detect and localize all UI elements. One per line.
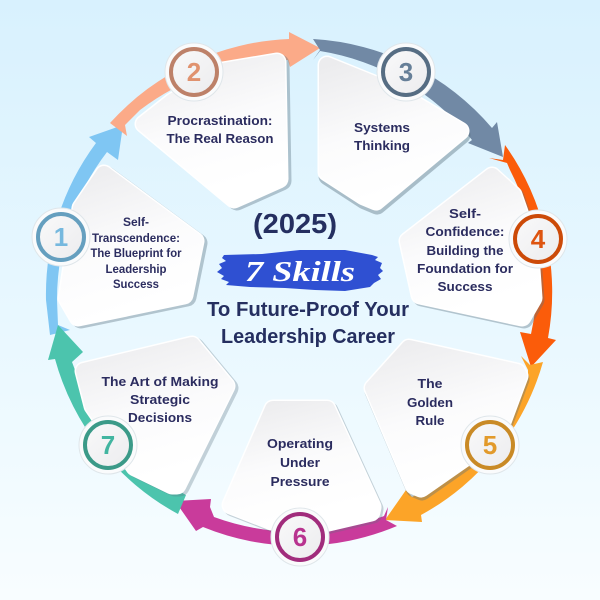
label 1: Self-Transcendence: Success <box>113 279 159 291</box>
label 4: Self-Confidence <box>417 206 513 294</box>
label 6: Operating Under Pressure <box>267 436 333 489</box>
label 1: Self-Transcendence: Transcendence: <box>92 233 180 245</box>
label 3: Systems Thinking: Systems <box>354 120 410 135</box>
label 6: Operating Under Pressure: Operating <box>267 436 333 451</box>
title: year: (2025) <box>253 208 337 239</box>
badge 2: 2 <box>187 57 201 87</box>
label 5: The Golden Rule: The <box>418 376 442 391</box>
label 7: The Art of Making Strategic Decisions: Decisions <box>128 410 192 425</box>
label 4: Self-Confidence: Self- <box>449 206 481 221</box>
arrow 3: slate <box>313 39 503 157</box>
badge 6 <box>271 508 329 566</box>
label 3: Systems Thinking <box>354 120 410 153</box>
subtitle: To Future-Proof Your <box>207 299 409 321</box>
subtitle <box>207 299 409 348</box>
label 5: The Golden Rule: Rule <box>416 413 444 428</box>
label 7: The Art of Making Strategic Decisions <box>102 374 219 425</box>
badge 3 <box>377 43 435 101</box>
arrow 7: teal <box>48 325 186 514</box>
arrow 2: peach <box>110 32 320 136</box>
badge 7 <box>79 416 137 474</box>
label 1: Self-Transcendence: The Blueprint for <box>90 248 182 260</box>
arrow 4: orange <box>489 145 556 367</box>
label 4: Self-Confidence: Building the <box>426 243 504 258</box>
label 2: Procrastination: The Real Reason <box>166 131 274 146</box>
card 7 <box>84 345 229 487</box>
badge 5: 5 <box>483 430 497 460</box>
badge 1 <box>32 208 90 266</box>
card 6 <box>231 409 374 525</box>
card 3 <box>327 65 461 205</box>
badge 6: 6 <box>293 522 307 552</box>
subtitle: Leadership Career <box>221 326 395 348</box>
badge 3: 3 <box>399 57 413 87</box>
badge 5 <box>461 416 519 474</box>
label 2: Procrastination: Procrastination: <box>168 113 272 128</box>
label 4: Self-Confidence: Success <box>438 279 492 294</box>
label 4: Self-Confidence: Foundation for <box>417 261 513 276</box>
label 1: Self-Transcendence: Leadership <box>106 264 166 276</box>
card 1 <box>67 174 198 319</box>
card 2 <box>144 62 282 201</box>
label 5: The Golden Rule <box>407 376 453 428</box>
banner: 7 Skills brush stroke <box>217 250 383 291</box>
arrow 1: blue <box>46 125 123 335</box>
badge 2 <box>165 43 223 101</box>
label 7: The Art of Making Strategic Decisions: Strategic <box>130 392 190 407</box>
label 2: Procrastination <box>166 113 274 146</box>
badge 4 <box>509 210 567 268</box>
label 4: Self-Confidence: Confidence: <box>426 224 504 239</box>
badge 4: 4 <box>531 224 546 254</box>
badge 7: 7 <box>101 430 115 460</box>
label 7: The Art of Making Strategic Decisions: The Art of Making <box>102 374 219 389</box>
badge 1: 1 <box>54 222 68 252</box>
arrow 6: magenta <box>175 499 397 546</box>
label 1: Self-Transcendence: Self- <box>123 217 149 229</box>
label 5: The Golden Rule: Golden <box>407 395 453 410</box>
card 5 <box>373 348 520 491</box>
arrow 5: amber <box>385 356 543 522</box>
card 4 <box>408 176 535 319</box>
label 6: Operating Under Pressure: Under <box>280 455 320 470</box>
banner: 7 Skills brush stroke: 7 Skills <box>245 257 355 288</box>
label 3: Systems Thinking: Thinking <box>354 138 410 153</box>
label 6: Operating Under Pressure: Pressure <box>270 474 330 489</box>
label 1: Self-Transcendence <box>90 217 182 291</box>
